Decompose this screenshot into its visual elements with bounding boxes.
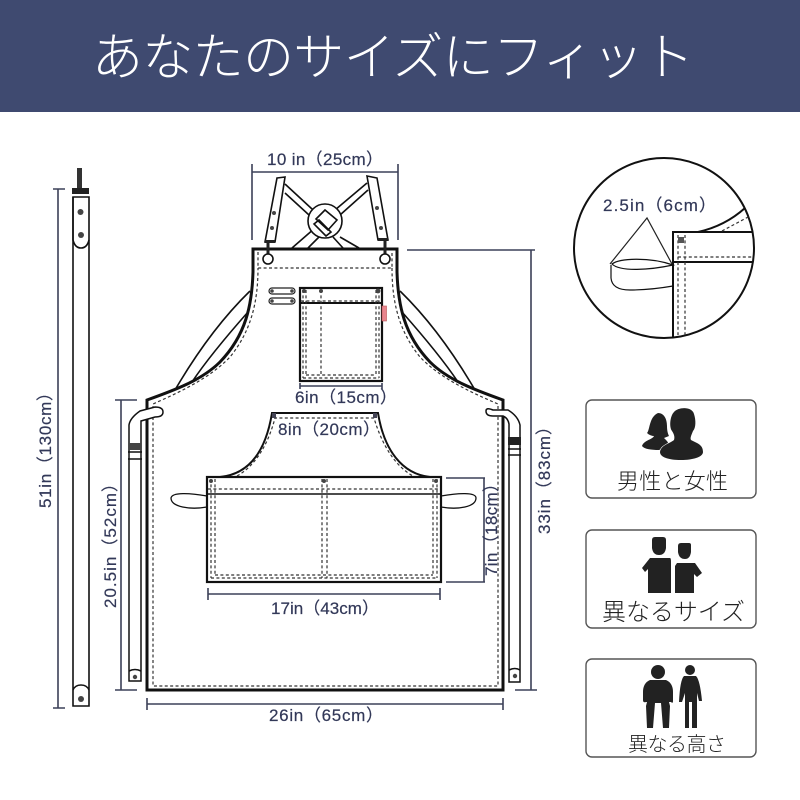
- detail label: 2.5in（6cm）: [603, 196, 716, 215]
- lower waist pocket: [207, 477, 441, 582]
- left side tie strap: [128, 407, 163, 681]
- small pen tabs: [269, 288, 295, 304]
- dimension: 7in pocket height: 7in（18cm）: [482, 475, 501, 576]
- detail circle: loop width: [574, 158, 754, 338]
- dimension: 7in pocket height: [446, 475, 501, 582]
- dimension: 33in total height: 33in（83cm）: [535, 418, 554, 534]
- feature card: different sizes: [586, 530, 756, 628]
- dimension: 6in pocket width: 6in（15cm）: [295, 388, 397, 407]
- icon: two standing figures: [643, 665, 702, 728]
- dimension: strap length 51in: [36, 189, 65, 708]
- dimension: strap length 51in: 51in（130cm）: [36, 384, 55, 508]
- dimension: 26in apron width: 26in（65cm）: [269, 706, 383, 725]
- icon: man and woman silhouettes: [642, 408, 703, 460]
- dimension: 10in neck width: 10 in（25cm）: [267, 150, 383, 169]
- dimension: 17in pocket width: 17in（43cm）: [271, 599, 379, 618]
- title: あなたのサイズにフィット: [92, 29, 694, 86]
- dimension: 33in total height: [407, 250, 554, 690]
- feature card: different heights: [586, 659, 756, 757]
- dimension: 8in top width: 8in（20cm）: [278, 420, 380, 439]
- card label: 異なるサイズ: [602, 599, 745, 626]
- dimension: 26in apron width: [147, 698, 503, 725]
- back straps behind apron body: [175, 291, 475, 390]
- logo badge: [308, 204, 342, 238]
- right side tie strap: [486, 409, 521, 682]
- header banner: [0, 0, 800, 112]
- eyelet rings: [263, 241, 390, 264]
- upper chest pocket: [300, 288, 382, 381]
- waist panel neck curve: [220, 413, 430, 477]
- feature card: men and women: [586, 400, 756, 498]
- dimension: 10in neck width: [252, 150, 398, 240]
- icon: two t-shirt figures: [642, 537, 702, 593]
- dimension: 17in pocket width: [208, 588, 440, 618]
- dimension: 20.5in side height: [101, 400, 137, 690]
- apron stitching: [153, 252, 498, 686]
- neck cross straps and logo: [265, 176, 388, 248]
- full length neck strap drawing: [72, 168, 89, 706]
- apron body outline: [147, 249, 503, 690]
- dimension: 20.5in side height: 20.5in（52cm）: [101, 475, 120, 608]
- card label: 異なる高さ: [628, 734, 726, 756]
- card label: 男性と女性: [617, 469, 728, 494]
- red label tag: [382, 306, 386, 321]
- side pocket loops: [171, 494, 476, 508]
